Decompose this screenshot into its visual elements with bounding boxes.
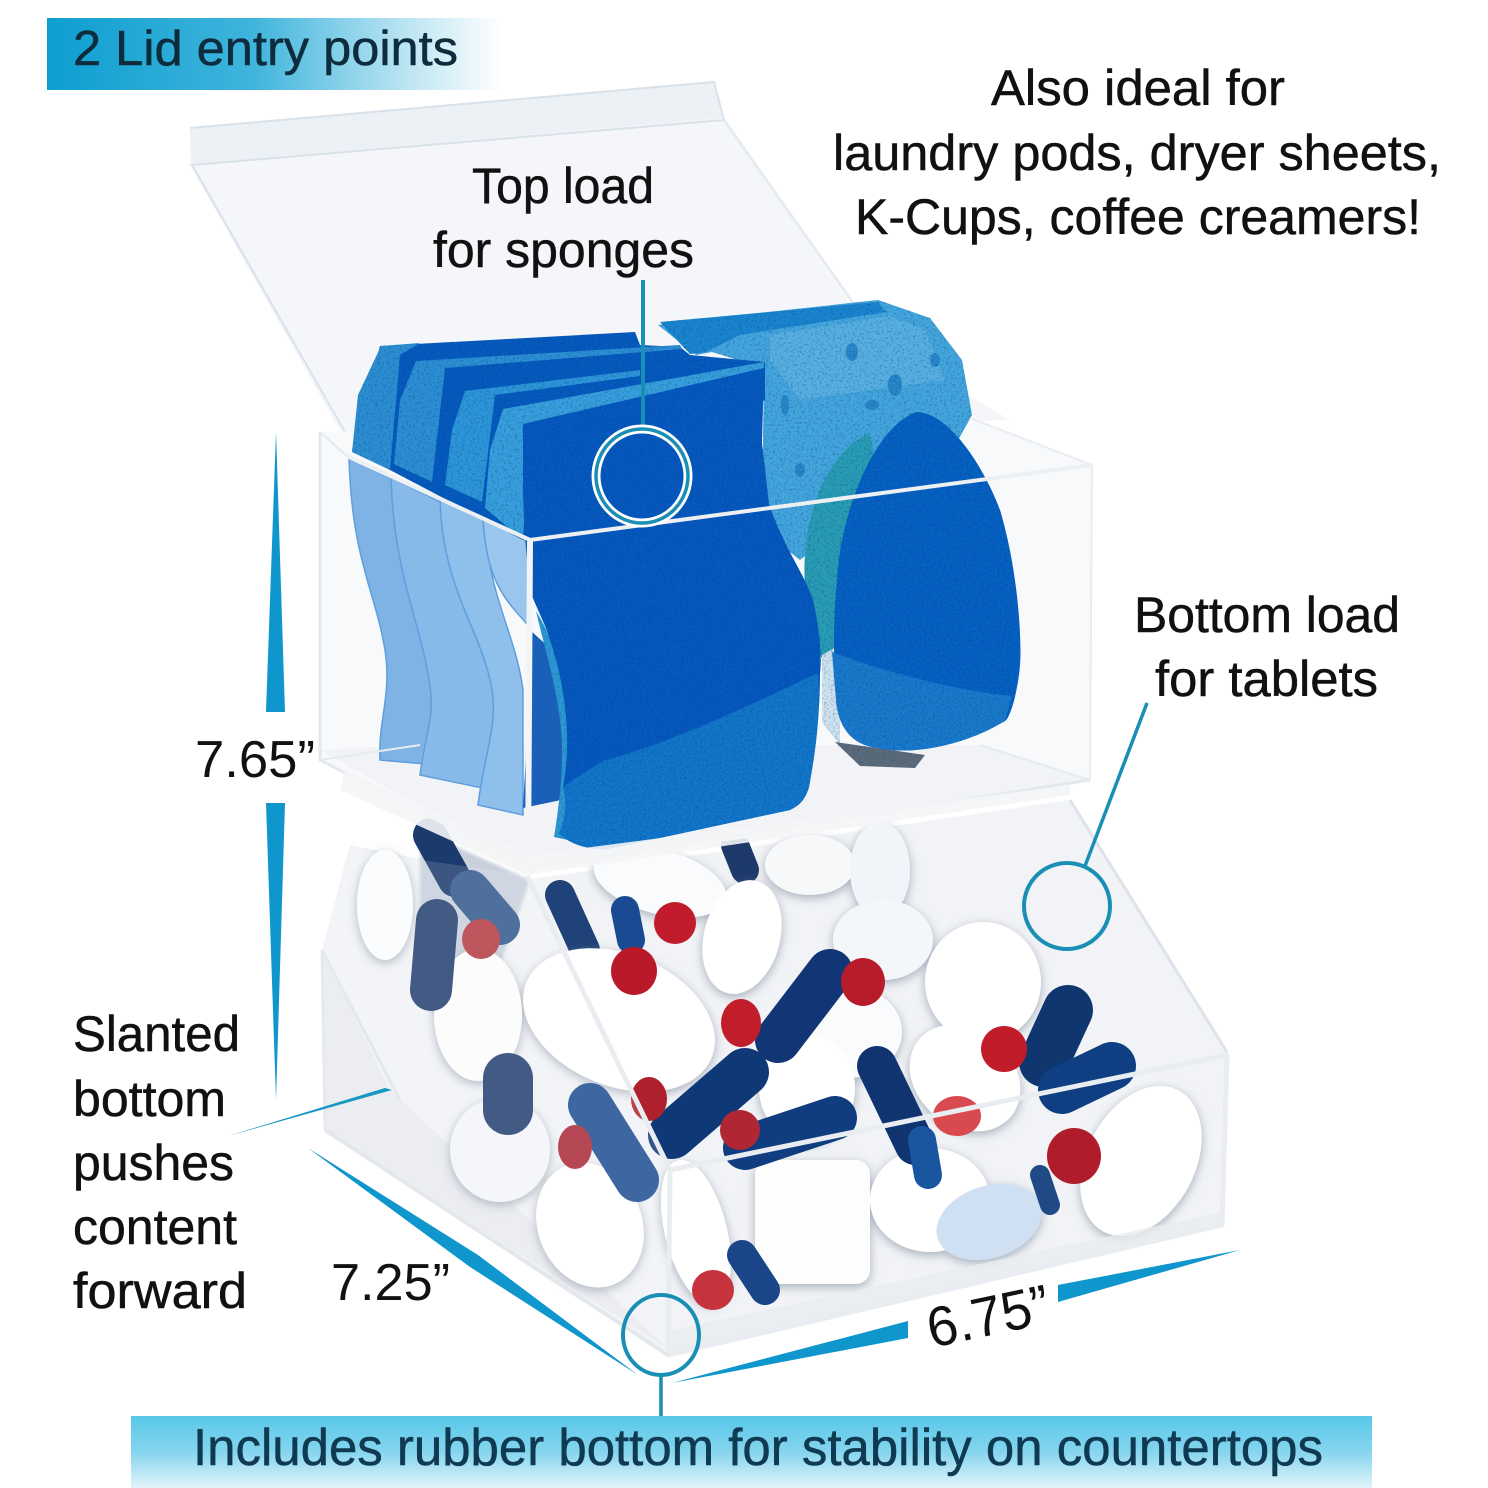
- callout: bottom load for tablets: Bottom load: [1134, 587, 1400, 643]
- callout: slanted bottom: [73, 1006, 392, 1319]
- callout: bottom load for tablets: for tablets: [1155, 651, 1378, 707]
- banner: rubber bottom: Includes rubber bottom for stability on countertops: [193, 1419, 1323, 1477]
- lower compartment background: [322, 800, 1227, 1355]
- sponge tops above box: [352, 332, 765, 540]
- tablets: red gel balls: [462, 902, 1101, 1310]
- callout: also ideal for: laundry pods, dryer sheets,: [833, 125, 1441, 181]
- callout: slanted bottom: bottom: [73, 1071, 226, 1127]
- front sponge: [523, 368, 821, 849]
- four wavy sponges seen through glass: [349, 458, 563, 815]
- dimension: depth 7.25 inches: [308, 1148, 638, 1375]
- upper compartment back glass: [320, 418, 1092, 868]
- lid: [190, 82, 1010, 440]
- dimension: width 6.75 inches: [672, 1250, 1240, 1383]
- tablets: back dark pods: [430, 835, 745, 950]
- callout: rubber bottom ring: [623, 1295, 699, 1417]
- callout: bottom load for tablets: [1024, 587, 1400, 949]
- dimension: height 7.65 inches: [195, 432, 315, 1100]
- callout: slanted bottom: Slanted: [73, 1006, 240, 1062]
- tablets: white pods: [357, 822, 1226, 1311]
- brush head scrub pad: [832, 412, 1020, 751]
- callout: slanted bottom: content: [73, 1199, 237, 1255]
- tablets: blue gel pods: [431, 910, 1112, 1290]
- dimension: depth 7.25 inches: 7.25”: [331, 1254, 450, 1312]
- callout: slanted bottom: forward: [73, 1263, 247, 1319]
- banner: 2 lid entry points: 2 Lid entry points: [73, 22, 458, 76]
- callout: top load for sponges: for sponges: [433, 222, 694, 278]
- callout: also ideal for: Also ideal for: [991, 60, 1285, 116]
- callout: slanted bottom: pushes: [73, 1135, 234, 1191]
- dimension: height 7.65 inches: 7.65”: [195, 731, 315, 789]
- banner: 2 lid entry points: [47, 18, 502, 90]
- callout: also ideal for: K-Cups, coffee creamers!: [855, 189, 1421, 245]
- callout: top load for sponges: [433, 158, 694, 523]
- callout: top load for sponges: Top load: [472, 158, 654, 214]
- lower compartment acrylic edges: [322, 800, 1227, 1355]
- callout: also ideal for: [833, 60, 1441, 245]
- product: acrylic dispenser: [190, 82, 1227, 1355]
- cellulose sponge and brush head at back: [658, 300, 972, 768]
- upper compartment glass edges: [320, 418, 1092, 875]
- dimension: width 6.75 inches: 6.75”: [921, 1272, 1055, 1360]
